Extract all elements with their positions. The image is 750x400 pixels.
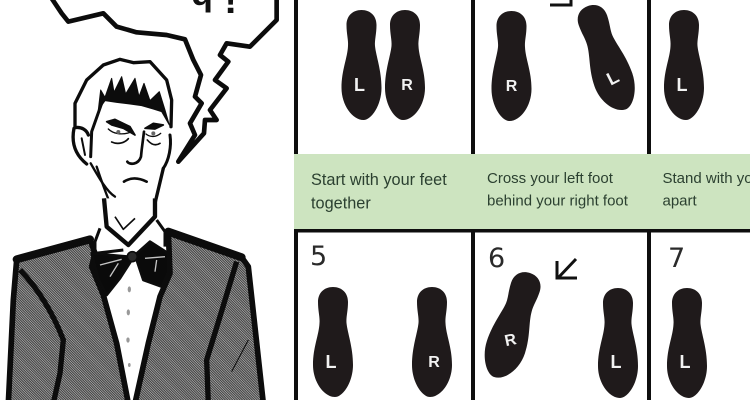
number 7: 7: [668, 243, 685, 274]
step 5: [310, 241, 452, 397]
speech bubble: [52, 0, 277, 162]
left foot: L: [610, 352, 622, 372]
left foot rotated: L: [603, 66, 622, 89]
step: crossed feet: [492, 0, 643, 121]
left foot: L: [354, 75, 365, 95]
right foot rotated: [477, 267, 549, 384]
head: [73, 59, 172, 168]
left foot: L: [326, 352, 336, 372]
left foot rotated: [569, 0, 643, 117]
tuxedo: [8, 198, 263, 400]
left foot: [598, 288, 638, 398]
illustration: man in tuxedo with speech bubble: [8, 0, 277, 400]
caption: start: Start with your feet: [311, 171, 447, 189]
right foot: R: [401, 77, 413, 94]
caption: start: together: [311, 194, 371, 212]
step: left foot, cut off: L: [676, 75, 688, 95]
number 6: 6: [488, 243, 505, 274]
panel grid: vertical and horizontal rules: [294, 0, 750, 400]
panel: green caption band: [294, 154, 750, 229]
right foot rotated: R: [503, 331, 518, 350]
right foot: R: [428, 354, 440, 371]
right foot: [492, 11, 532, 121]
step: left foot, cut off: [664, 10, 704, 120]
right foot: R: [506, 78, 518, 95]
jaw and mouth: [91, 163, 163, 203]
bow tie: [92, 242, 168, 295]
shirt buttons: [126, 286, 131, 367]
caption: cross: behind your right foot: [487, 192, 629, 210]
left foot: L: [680, 352, 690, 372]
caption: stand: apart: [662, 192, 698, 210]
step 4: feet together: [342, 10, 425, 120]
left foot: [667, 288, 707, 398]
arrow: [550, 0, 571, 5]
arrow: [557, 259, 577, 278]
left foot: [313, 287, 353, 397]
step 6: [477, 243, 638, 398]
number 5: 5: [310, 241, 327, 272]
step 7: [667, 243, 707, 398]
caption: cross: Cross your left foot: [487, 170, 613, 187]
right foot: [412, 287, 452, 397]
